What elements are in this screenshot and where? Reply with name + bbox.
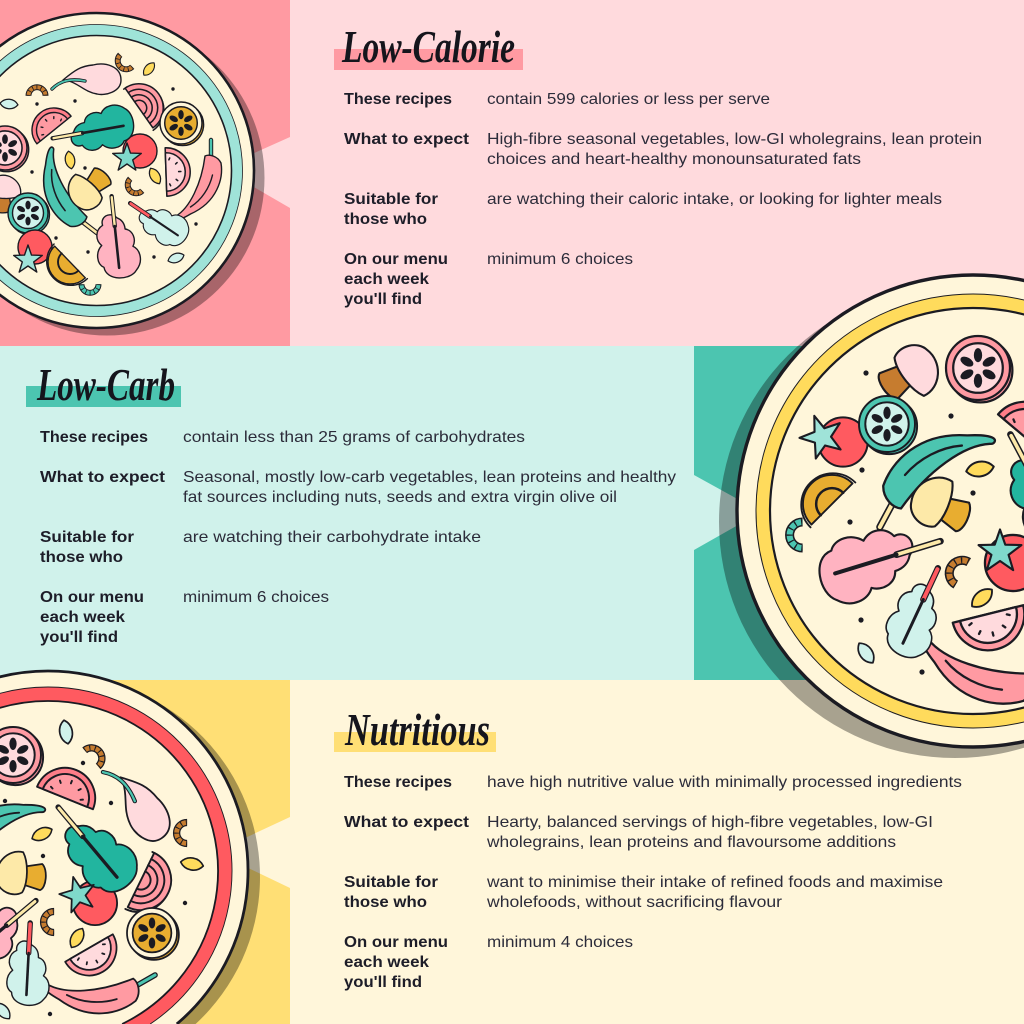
- text block: Nutritious details: What to expect: [344, 814, 470, 831]
- text block: Nutritious details: These recipes: [344, 774, 452, 791]
- plate shadow: [0, 677, 260, 1024]
- text block: Low-Calorie details: These recipes: [344, 91, 452, 108]
- text block: Low-Calorie details: are watching their caloric intake, or looking for lighter meals: [487, 191, 942, 208]
- text block: Low-Carb details: each week: [40, 609, 125, 626]
- text block: Nutritious details: you'll find: [344, 974, 422, 991]
- text block: Nutritious details: each week: [344, 954, 429, 971]
- heading: Low-Calorie: Low-Calorie: [341, 21, 515, 72]
- text block: Low-Carb details: minimum 6 choices: [183, 589, 329, 606]
- text block: Nutritious details: Suitable for: [344, 874, 438, 891]
- text block: Low-Calorie details: High-fibre seasonal vegetables, low-GI wholegrains, lean protein: [487, 131, 982, 148]
- text block: Nutritious details: want to minimise their intake of refined foods and maximise: [486, 874, 943, 891]
- text block: Nutritious details: Hearty, balanced servings of high-fibre vegetables, low-GI: [487, 814, 933, 831]
- text block: Nutritious details: wholefoods, without sacrificing flavour: [486, 894, 783, 911]
- text block: Low-Calorie details: contain 599 calories or less per serve: [487, 91, 770, 108]
- plate rim: [0, 671, 248, 1024]
- panel: low-carb background: [0, 346, 1024, 680]
- text block: Low-Calorie details: each week: [344, 271, 429, 288]
- panel: nutritious background: [0, 680, 1024, 1024]
- text block: Nutritious details: those who: [344, 894, 427, 911]
- food illustrations: [0, 55, 222, 295]
- heading: Low-Carb: Low-Carb: [36, 359, 175, 410]
- text block: Low-Carb details: What to expect: [40, 469, 166, 486]
- text block: Low-Carb details: Suitable for: [40, 529, 134, 546]
- text block: Nutritious details: minimum 4 choices: [487, 934, 633, 951]
- text block: Low-Calorie details: On our menu: [344, 251, 448, 268]
- text block: Low-Calorie details: [344, 91, 982, 308]
- heading: Nutritious: Nutritious: [344, 704, 490, 755]
- plate rim: [737, 275, 1024, 747]
- text block: Low-Carb details: those who: [40, 549, 123, 566]
- text block: Nutritious details: [344, 774, 962, 991]
- text block: Nutritious details: wholegrains, lean proteins and flavoursome additions: [486, 834, 896, 851]
- text block: Low-Carb details: [40, 429, 676, 646]
- panel: low-carb plate backdrop with notch: [694, 346, 1024, 680]
- text block: Low-Carb details: contain less than 25 grams of carbohydrates: [183, 429, 525, 446]
- text block: Nutritious details: On our menu: [344, 934, 448, 951]
- panel: nutritious plate backdrop with notch: [0, 680, 290, 1024]
- plate: low-carb: [719, 275, 1024, 758]
- plate shadow: [719, 286, 1024, 758]
- food illustrations: [0, 719, 204, 1024]
- text block: Low-Calorie details: minimum 6 choices: [487, 251, 633, 268]
- plate rim: [0, 13, 254, 328]
- text block: Low-Calorie details: What to expect: [344, 131, 470, 148]
- plate: nutritious: [0, 671, 260, 1024]
- text block: Low-Carb details: On our menu: [40, 589, 144, 606]
- panel: low-calorie background: [0, 0, 1024, 346]
- text block: Low-Calorie details: you'll find: [344, 291, 422, 308]
- text block: Low-Calorie details: choices and heart-healthy monounsaturated fats: [487, 151, 861, 168]
- text block: Low-Carb details: are watching their carbohydrate intake: [183, 529, 481, 546]
- plate: low-calorie: [0, 13, 264, 336]
- text block: Low-Calorie details: Suitable for: [344, 191, 438, 208]
- text block: Nutritious details: have high nutritive value with minimally processed ingredients: [487, 774, 962, 791]
- text block: Low-Carb details: you'll find: [40, 629, 118, 646]
- panel: low-calorie plate backdrop with notch: [0, 0, 290, 346]
- text block: Low-Calorie details: those who: [344, 211, 427, 228]
- text block: Low-Carb details: These recipes: [40, 429, 148, 446]
- text block: Low-Carb details: fat sources including nuts, seeds and extra virgin olive oil: [183, 489, 617, 506]
- food illustrations: [788, 336, 1024, 714]
- text block: Low-Carb details: Seasonal, mostly low-carb vegetables, lean proteins and healthy: [183, 469, 676, 486]
- plate shadow: [0, 20, 264, 336]
